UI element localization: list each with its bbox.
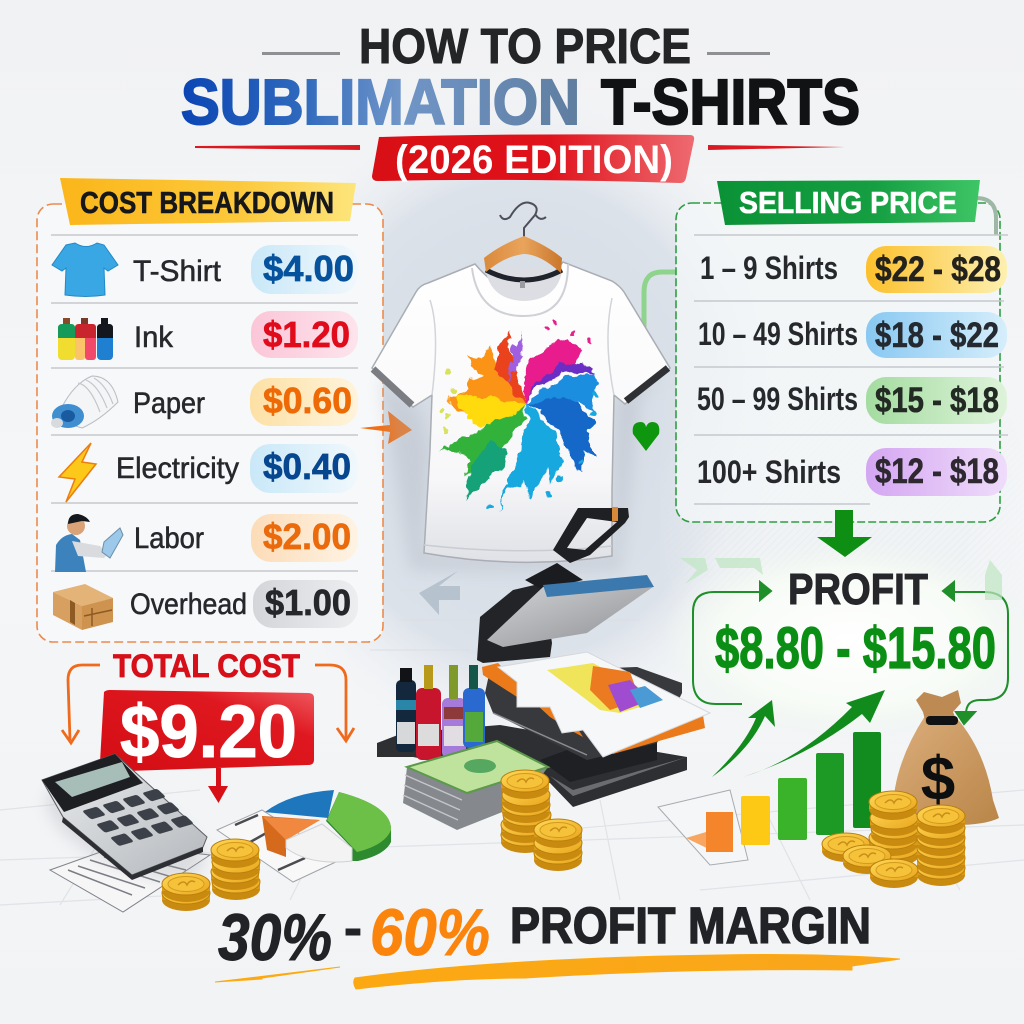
row: 10-49 shirts: $18 - $22 <box>875 316 999 355</box>
edition badge <box>195 134 845 183</box>
transfer print <box>547 663 663 713</box>
garment on press <box>498 652 710 757</box>
pie chart <box>262 790 391 862</box>
row: labor <box>55 514 358 572</box>
upper platen <box>487 587 653 647</box>
row: overhead <box>53 580 358 630</box>
ink bottles <box>396 665 485 760</box>
calculator with receipts <box>33 754 217 912</box>
shirt shadow <box>380 372 665 570</box>
row: paper <box>51 376 358 428</box>
icon: green heart <box>633 422 659 451</box>
profit margin banner: 30% <box>218 900 332 974</box>
receipt <box>50 845 210 912</box>
hanger <box>500 203 546 240</box>
icon: lightning bolt <box>59 443 96 502</box>
profit margin banner: - <box>344 900 362 956</box>
row: 10-49 shirts: 10 – 49 Shirts <box>698 316 858 352</box>
title: sublimation t-shirts: T-SHIRTS <box>601 66 860 138</box>
row: 1-9 shirts: 1 – 9 Shirts <box>700 250 838 286</box>
arrow: cost to shirt <box>360 411 412 444</box>
rainbow swirl print <box>439 323 598 512</box>
total cost badge: $9.20 <box>120 690 297 773</box>
row: 50-99 shirts <box>697 377 1007 424</box>
money bag <box>893 690 999 825</box>
arrow: price to profit <box>817 510 872 557</box>
panel: cost breakdown <box>37 178 383 642</box>
row: ink <box>58 311 358 360</box>
row: 50-99 shirts: 50 – 99 Shirts <box>697 381 858 417</box>
shirt body <box>372 262 670 562</box>
row: electricity <box>59 443 358 502</box>
profit margin banner: PROFIT MARGIN <box>510 897 871 954</box>
row: electricity: $0.40 <box>263 446 351 487</box>
profit connector arrows <box>693 582 1008 724</box>
t-shirt on hanger <box>372 203 670 570</box>
coins: right stacks <box>822 791 965 888</box>
row: labor: Labor <box>134 522 204 555</box>
cost breakdown header <box>60 178 356 225</box>
icon: cardboard box <box>53 584 113 630</box>
icon: ink bottles <box>58 318 113 360</box>
calculator body <box>42 754 207 875</box>
ghost arrow <box>419 571 460 615</box>
profit margin banner: 60% <box>370 895 490 969</box>
row: t-shirt: T-Shirt <box>133 255 222 288</box>
lower frame <box>485 667 682 760</box>
row: overhead: Overhead <box>130 588 247 621</box>
row: 100+ shirts: 100+ Shirts <box>697 454 841 490</box>
growth arrows <box>712 690 885 777</box>
row: 100+ shirts <box>697 448 1007 496</box>
row: 1-9 shirts <box>700 246 1007 293</box>
wooden hanger arms <box>484 236 562 273</box>
selling price header: SELLING PRICE <box>739 185 957 220</box>
row: 50-99 shirts: $15 - $18 <box>875 381 999 420</box>
orange lower platen <box>482 663 705 754</box>
cuffs <box>373 369 412 405</box>
back arm <box>477 583 552 663</box>
icon: worker <box>55 514 123 572</box>
row: electricity: Electricity <box>116 452 239 485</box>
heat press machine <box>377 507 710 871</box>
icon: paper roll <box>51 376 118 428</box>
title: how to price: HOW TO PRICE <box>359 20 691 74</box>
row: 100+ shirts: $12 - $18 <box>875 452 999 491</box>
row: t-shirt: $4.00 <box>263 248 354 289</box>
bar chart <box>658 732 881 865</box>
arrows: total cost <box>62 665 354 743</box>
row: paper: Paper <box>133 387 205 420</box>
profit margin banner <box>215 895 900 989</box>
row: ink: Ink <box>134 321 174 354</box>
profit heading: PROFIT <box>788 565 928 614</box>
underline strokes <box>215 954 900 989</box>
row: ink: $1.20 <box>263 314 350 355</box>
pedestal <box>540 735 657 782</box>
row: 1-9 shirts: $22 - $28 <box>875 250 1001 289</box>
row: labor: $2.00 <box>263 516 351 557</box>
chart paper <box>658 790 748 865</box>
total cost label: TOTAL COST <box>113 648 300 684</box>
row: 10-49 shirts <box>698 312 1007 358</box>
coin stack <box>501 770 582 871</box>
neck inner <box>486 267 562 301</box>
panel: selling price <box>676 180 1008 522</box>
coins: left stack <box>162 839 260 911</box>
row: paper: $0.60 <box>263 380 352 421</box>
cash stack <box>403 741 548 830</box>
row: overhead: $1.00 <box>265 582 351 623</box>
title: sublimation t-shirts <box>181 66 860 138</box>
icon: blue t-shirt <box>52 243 118 296</box>
total cost badge <box>100 690 314 803</box>
title: sublimation t-shirts: SUBLIMATION <box>181 66 580 138</box>
money bag: $ <box>921 745 955 814</box>
row: t-shirt <box>52 243 358 296</box>
ghost decoration green <box>680 558 1002 600</box>
receipt under pie chart <box>217 810 340 882</box>
base plate <box>377 725 687 807</box>
edition badge: (2026 EDITION) <box>395 138 673 182</box>
connector: green curve <box>644 272 676 328</box>
cost breakdown header: COST BREAKDOWN <box>80 185 334 220</box>
handle <box>553 508 629 563</box>
